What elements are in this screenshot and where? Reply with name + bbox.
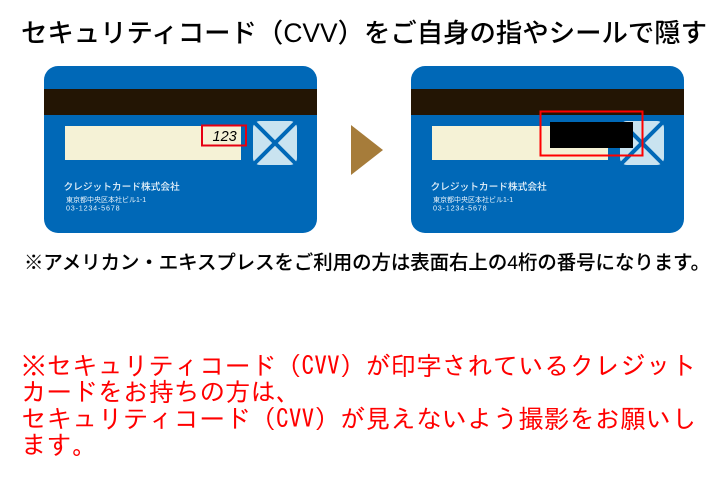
red highlight box <box>202 126 246 146</box>
card: CVV covered <box>411 66 684 233</box>
title: セキュリティコード（CVV）をご自身の指やシールで隠す <box>21 18 707 48</box>
company name: クレジットカード株式会社 <box>64 180 180 193</box>
red warning text: セキュリティコード（CVV）が見えないよう撮影をお願いし <box>21 407 697 432</box>
company address: 東京都中央区本社ビル1-1 <box>66 195 146 204</box>
icon: card chip <box>620 121 664 165</box>
red warning text <box>21 354 697 458</box>
signature panel <box>65 126 241 160</box>
company phone: 03-1234-5678 <box>66 204 120 212</box>
finger cover <box>550 122 633 148</box>
red highlight box <box>540 112 642 156</box>
company phone: 03-1234-5678 <box>433 204 487 212</box>
red warning text: ます。 <box>21 433 98 458</box>
red warning text: ※セキュリティコード（CVV）が印字されているクレジット <box>21 354 697 379</box>
company address: 東京都中央区本社ビル1-1 <box>433 195 513 204</box>
signature panel <box>432 126 608 160</box>
arrow <box>351 125 383 175</box>
CVV number: 123 <box>212 129 237 145</box>
American Express note: ※アメリカン・エキスプレスをご利用の方は表面右上の4桁の番号になります。 <box>24 252 710 274</box>
icon: card chip <box>253 121 297 165</box>
red warning text: カードをお持ちの方は、 <box>21 380 302 405</box>
card: CVV visible <box>44 66 317 233</box>
company name: クレジットカード株式会社 <box>430 180 547 193</box>
